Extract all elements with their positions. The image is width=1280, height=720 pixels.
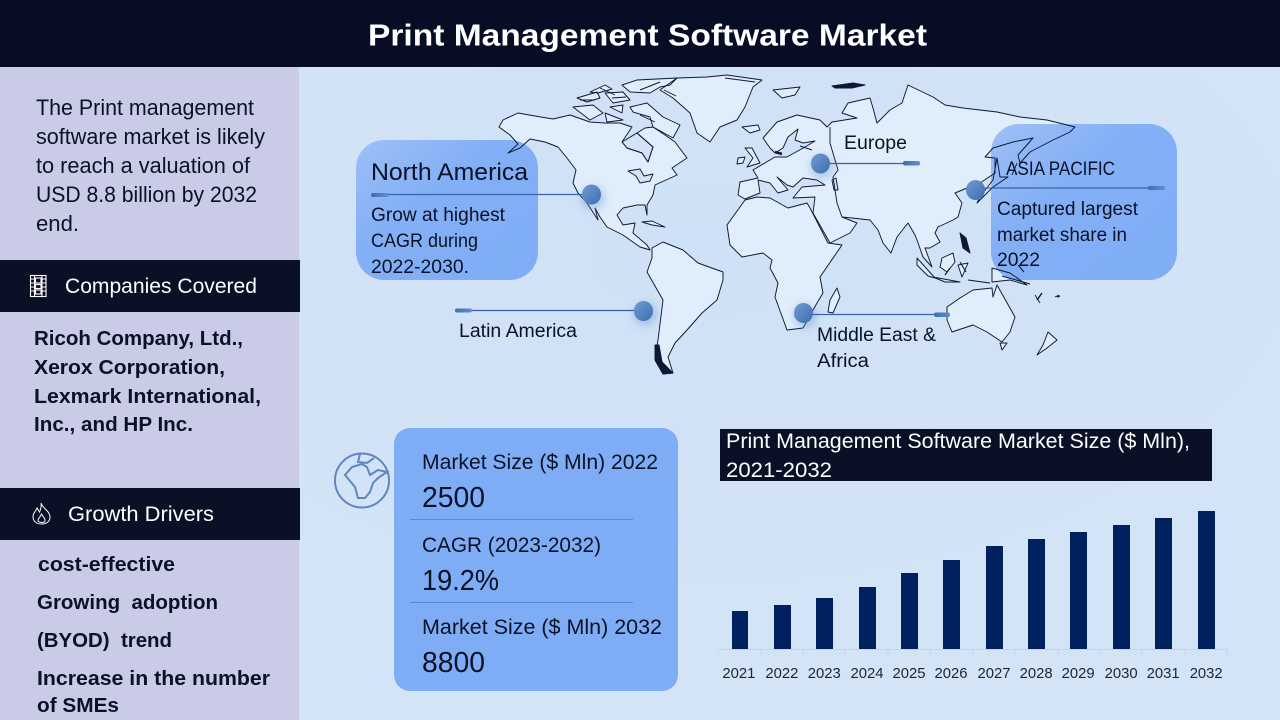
chart heading: 2021-2032 xyxy=(726,458,832,482)
stat: market size 2022 xyxy=(422,451,658,514)
heading: companies covered: Companies Covered xyxy=(65,274,257,298)
label: europe: Europe xyxy=(844,133,907,154)
label: north america xyxy=(371,159,528,278)
axis labels: 2027 xyxy=(978,665,1010,682)
axis labels: 2032 xyxy=(1190,665,1223,682)
label: north america: CAGR during xyxy=(371,231,478,252)
stat: cagr xyxy=(422,534,601,597)
chart heading: Print Management Software Market Size ($ Mln), xyxy=(726,429,1190,453)
text block: companies: Xerox Corporation, xyxy=(34,356,225,379)
label: north america: North America xyxy=(371,159,528,186)
text block: market summary: The Print management xyxy=(36,95,254,120)
heading: companies covered xyxy=(0,260,300,312)
icon: flame xyxy=(33,503,50,524)
label: asia pacific: market share in xyxy=(997,225,1127,246)
label: north america: Grow at highest xyxy=(371,205,506,226)
axis labels: 2029 xyxy=(1062,665,1095,682)
label: middle east and africa: Africa xyxy=(817,351,869,372)
label: latin america: Latin America xyxy=(459,321,577,342)
panel: left sidebar xyxy=(0,67,300,720)
stat: market size 2032: 8800 xyxy=(422,647,485,679)
label: middle east and africa xyxy=(817,325,936,372)
marker: europe xyxy=(810,154,920,179)
text block: companies xyxy=(34,327,261,436)
marker: latin america xyxy=(455,301,657,326)
stat: market size 2022: 2500 xyxy=(422,482,485,514)
panel: market stats xyxy=(394,428,678,691)
world map fill xyxy=(499,75,1075,374)
heading: growth drivers: Growth Drivers xyxy=(68,502,214,526)
marker: north america xyxy=(371,184,605,210)
panel: asia pacific box xyxy=(991,124,1177,280)
axis labels: 2024 xyxy=(850,665,884,682)
text block: growth drivers list: (BYOD) trend xyxy=(37,630,172,652)
title: Print Management Software Market xyxy=(368,18,927,52)
text block: market summary: end. xyxy=(36,211,79,236)
label: asia pacific: Captured largest xyxy=(997,199,1139,220)
stat: cagr: 19.2% xyxy=(422,565,499,597)
axis labels: 2021 xyxy=(722,665,755,682)
axis labels: 2025 xyxy=(892,665,926,682)
text block: companies: Lexmark International, xyxy=(34,385,261,408)
text block: companies: Ricoh Company, Ltd., xyxy=(34,327,243,350)
text block: market summary: USD 8.8 billion by 2032 xyxy=(36,182,257,207)
axis labels: 2028 xyxy=(1020,665,1053,682)
axis labels: 2022 xyxy=(765,665,798,682)
text block: growth drivers list: of SMEs xyxy=(37,695,119,717)
label: asia pacific: 2022 xyxy=(997,250,1040,271)
chart heading xyxy=(720,429,1212,482)
stat: market size 2032: Market Size ($ Mln) 2032 xyxy=(422,616,662,639)
axis labels: 2026 xyxy=(934,665,968,682)
axis labels: 2031 xyxy=(1147,665,1180,682)
text block: market summary: to reach a valuation of xyxy=(36,153,251,178)
text block: growth drivers list: cost-effective xyxy=(38,554,175,576)
icon: globe xyxy=(335,454,389,508)
stat: cagr: CAGR (2023-2032) xyxy=(422,534,601,557)
text block: growth drivers list: Increase in the number xyxy=(37,668,270,690)
world map outline xyxy=(499,75,1075,374)
marker: middle east and africa xyxy=(793,303,950,328)
text block: growth drivers list: Growing adoption xyxy=(37,592,218,614)
text block: growth drivers list xyxy=(37,554,270,717)
axis labels: 2023 xyxy=(808,665,841,682)
label: north america: 2022-2030. xyxy=(371,257,469,278)
stat: market size 2032 xyxy=(422,616,662,679)
label: asia pacific xyxy=(997,159,1139,271)
panel: north america box xyxy=(356,140,538,280)
heading: growth drivers xyxy=(0,488,300,540)
icon: film strip xyxy=(30,276,46,296)
axis labels: 2030 xyxy=(1105,665,1138,682)
stat: market size 2022: Market Size ($ Mln) 2022 xyxy=(422,451,658,474)
title banner xyxy=(0,0,1280,67)
text block: market summary xyxy=(36,95,265,236)
text block: market summary: software market is likely xyxy=(36,124,265,149)
axis labels xyxy=(722,665,1223,682)
label: asia pacific: ASIA PACIFIC xyxy=(1006,159,1115,180)
marker: asia pacific xyxy=(966,180,1165,200)
label: middle east and africa: Middle East & xyxy=(817,325,936,346)
bar chart xyxy=(718,511,1228,682)
text block: companies: Inc., and HP Inc. xyxy=(34,413,193,436)
